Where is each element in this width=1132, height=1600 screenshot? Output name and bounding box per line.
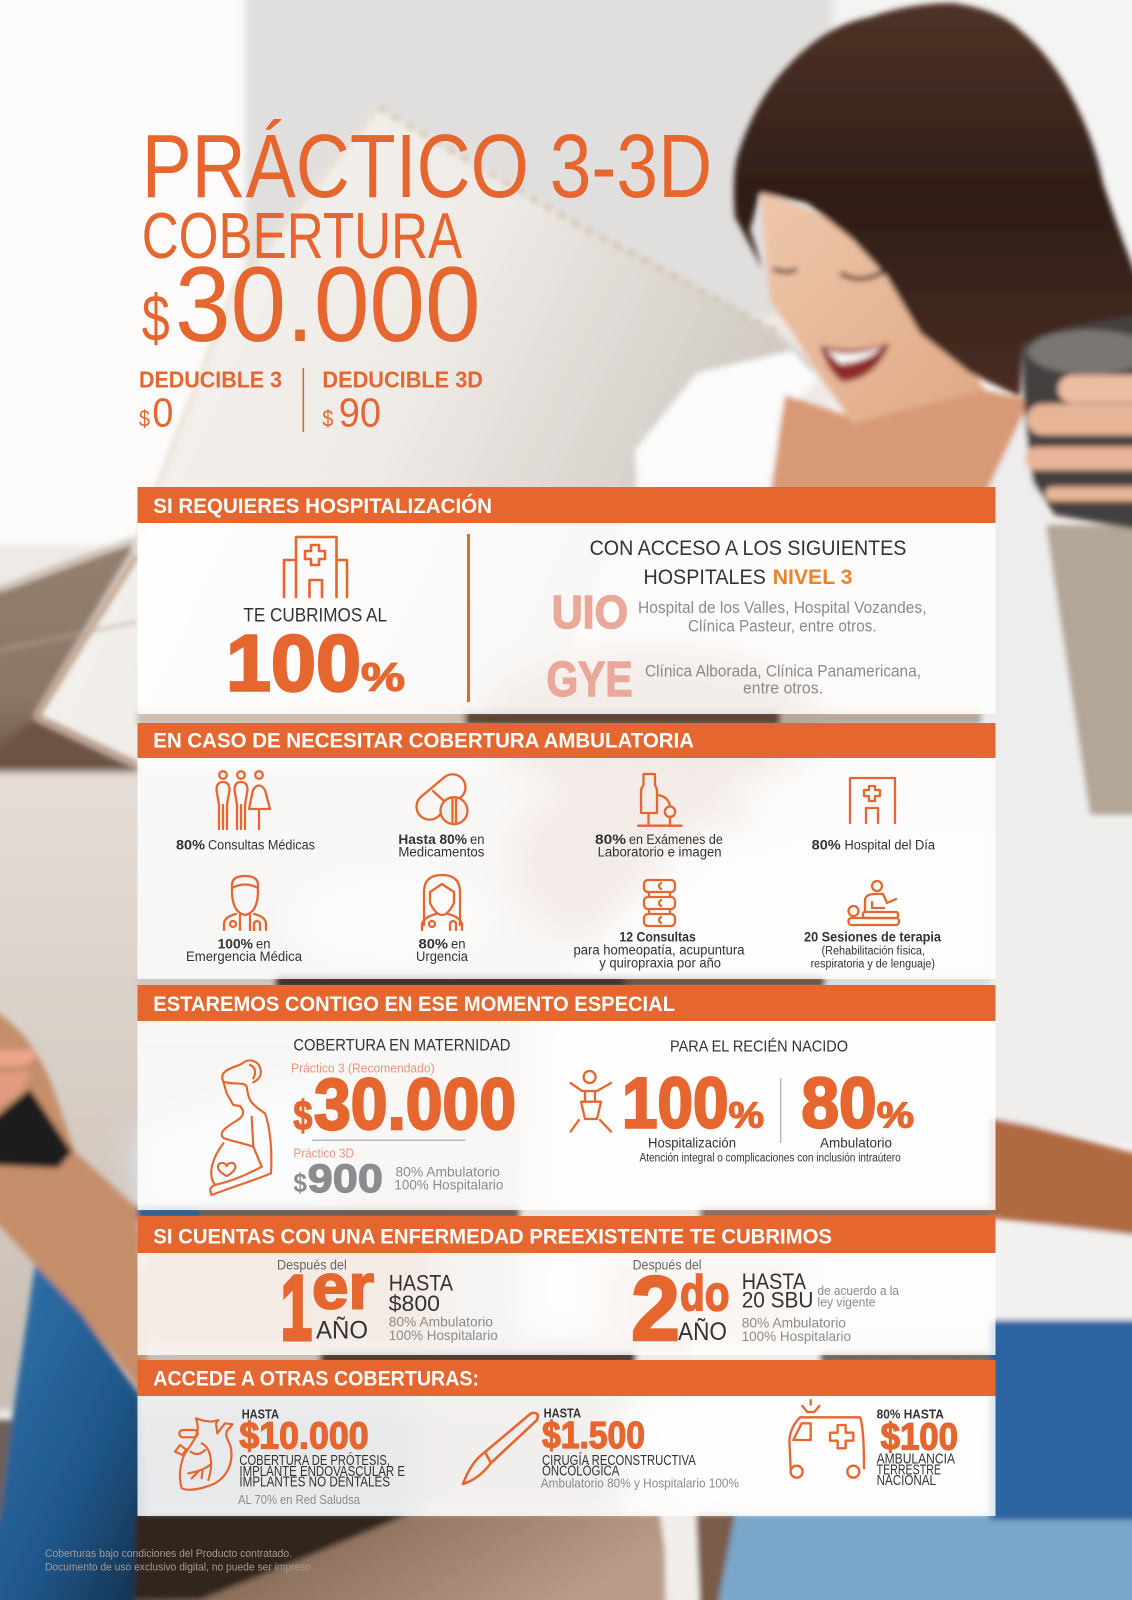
coverage: prosthesis: AL 70% en Red Saludsa: [238, 1492, 361, 1507]
city: GYE: entre otros.: [743, 680, 823, 698]
deductible 3: 0: [152, 390, 173, 436]
heading: maternity coverage: COBERTURA EN MATERNIDAD: [293, 1037, 510, 1055]
amount: $30.000 maternity: $: [293, 1092, 312, 1139]
header bar: SI CUENTAS CON UNA ENFERMEDAD PREEXISTENTE TE CUBRIMOS: [153, 1224, 832, 1248]
header bar: [138, 985, 996, 1021]
text: hospital del dia: Hospital del Día: [844, 837, 935, 852]
text: examenes: 80%: [595, 832, 626, 847]
second year block: do: [680, 1266, 730, 1322]
second year block: Después del: [633, 1256, 702, 1272]
second year block: HASTA: [742, 1269, 806, 1294]
text: $900 split: 100% Hospitalario: [394, 1176, 504, 1192]
icon: scalpel: [463, 1413, 538, 1484]
text: te cubrimos al: TE CUBRIMOS AL: [243, 606, 387, 627]
city: UIO: Clínica Pasteur, entre otros.: [688, 618, 877, 636]
text: consultas medicas: Consultas Médicas: [208, 837, 315, 852]
text: examenes: [595, 832, 723, 860]
panel background: [138, 523, 996, 714]
text: alternative therapies: para homeopatía, acupuntura: [574, 943, 745, 958]
header bar: [138, 1360, 996, 1396]
coverage: prosthesis: COBERTURA DE PRÓTESIS,: [239, 1452, 390, 1469]
deductible 3: $: [139, 406, 150, 432]
text: emergencia medica: [186, 936, 302, 964]
text: consultas medicas: 80%: [176, 837, 205, 852]
stat: 80% outpatient: [801, 1065, 914, 1151]
divider: [780, 1078, 781, 1143]
text: medicamentos: Hasta 80%: [398, 832, 467, 847]
coverage: reconstructive surgery: Ambulatorio 80% y Hospitalario 100%: [541, 1476, 739, 1490]
stat: 100% hospitalization: %: [728, 1095, 764, 1136]
first year block: Después del: [277, 1256, 347, 1272]
vertical divider: [467, 534, 470, 702]
first year block: HASTA: [389, 1271, 453, 1296]
deductible 3D: DEDUCIBLE 3D: [322, 367, 483, 393]
coverage: prosthesis: $10.000: [239, 1415, 369, 1457]
deductible 3D: [322, 367, 483, 436]
amount: $900: $: [293, 1168, 307, 1198]
text: $900 split: [394, 1164, 504, 1192]
deductible divider: [302, 368, 304, 432]
first year block: 1: [281, 1257, 312, 1359]
panel background: [138, 1396, 996, 1516]
first year block: $800: [389, 1291, 440, 1316]
panel background: [138, 1021, 996, 1210]
stat: 100% hospitalization: Hospitalización: [648, 1135, 736, 1151]
coverage: ambulance: AMBULANCIA: [877, 1451, 955, 1467]
coverage: ambulance: NACIONAL: [877, 1473, 936, 1489]
heading: newborn: PARA EL RECIÉN NACIDO: [670, 1037, 848, 1056]
footer note: [45, 1548, 314, 1574]
heading: cobertura: COBERTURA: [142, 199, 463, 272]
coverage: prosthesis: [238, 1406, 405, 1507]
icon: day hospital: [850, 778, 895, 823]
icon: heart: [175, 1418, 233, 1490]
coverage: ambulance: $100: [881, 1416, 958, 1458]
text: urgencia: [416, 936, 468, 964]
footer note: Coberturas bajo condiciones del Producto contratado.: [45, 1548, 292, 1560]
city: UIO: UIO: [552, 586, 628, 638]
second year block: [631, 1256, 900, 1360]
heading: hospital access: NIVEL 3: [773, 565, 853, 589]
deductible 3D: 90: [339, 390, 381, 436]
text: emergencia medica: en: [256, 936, 270, 951]
text: examenes: en Exámenes de: [629, 832, 723, 847]
footer note: Documento de uso exclusivo digital, no puede ser impreso.: [45, 1562, 314, 1574]
text: urgencia: 80%: [418, 936, 448, 951]
text: emergencia medica: 100%: [218, 936, 253, 951]
icon: female doctor: [422, 875, 462, 930]
first year block: 80% Ambulatorio: [389, 1314, 493, 1330]
text: alternative therapies: y quiropraxia por año: [599, 955, 721, 970]
second year block: 20 SBU: [742, 1288, 814, 1313]
panel: pre-existing conditions: [138, 1216, 996, 1360]
icon: spine: [644, 880, 675, 926]
left: hand, arm, phone: [0, 1008, 150, 1400]
text: therapy sessions: (Rehabilitación física,: [822, 946, 925, 958]
icon: baby: [571, 1071, 611, 1132]
stat: 100% hospitalization: 100: [622, 1065, 728, 1144]
city: GYE: GYE: [546, 653, 632, 707]
heading: hospital access: HOSPITALES: [644, 565, 766, 589]
header bar: ACCEDE A OTRAS COBERTURAS:: [153, 1367, 479, 1391]
text: hospital del dia: 80%: [812, 837, 841, 852]
coverage: reconstructive surgery: HASTA: [544, 1406, 582, 1421]
text: medicamentos: en: [470, 832, 484, 847]
deductible 3D: $: [322, 406, 334, 432]
text: alternative therapies: [574, 930, 745, 970]
coverage: prosthesis: HASTA: [242, 1406, 280, 1421]
amount: $30.000 maternity: 30.000: [314, 1065, 516, 1145]
city: UIO: [552, 586, 926, 638]
text: emergencia medica: Emergencia Médica: [186, 949, 302, 964]
header bar: [138, 723, 996, 758]
coverage: ambulance: [877, 1406, 958, 1489]
stat: 80% outpatient: 80: [801, 1065, 877, 1144]
header bar: SI REQUIERES HOSPITALIZACIÓN: [153, 493, 492, 518]
amount: $30.000: $: [142, 281, 170, 355]
icon: ambulance: [789, 1400, 864, 1478]
right side: [990, 1295, 1132, 1520]
first year block: [277, 1250, 498, 1359]
title block: [139, 117, 712, 436]
second year block: de acuerdo a la: [818, 1283, 900, 1298]
header bar: ESTAREMOS CONTIGO EN ESE MOMENTO ESPECIAL: [153, 992, 675, 1016]
first year block: AÑO: [316, 1316, 368, 1345]
city: GYE: Clínica Alborada, Clínica Panamericana,: [645, 663, 921, 681]
title: Práctico 3-3D: PRÁCTICO 3-3D: [142, 117, 712, 217]
header bar: [138, 487, 996, 523]
text: alternative therapies: 12 Consultas: [619, 930, 696, 945]
second year block: 100% Hospitalario: [742, 1328, 851, 1344]
label: practico 3D: Práctico 3D: [293, 1145, 354, 1160]
text: medicamentos: Medicamentos: [398, 845, 485, 860]
panel: maternity: [138, 985, 996, 1210]
icon: male doctor: [224, 876, 266, 930]
panel background: [138, 758, 996, 979]
fingers: [1058, 375, 1132, 403]
coverage: reconstructive surgery: ONCOLÓGICA: [542, 1463, 620, 1480]
bottom floor and leg: [135, 1514, 665, 1600]
stat: 80% outpatient: %: [877, 1095, 914, 1136]
coverage: prosthesis: IMPLANTES NO DENTALES: [239, 1475, 390, 1491]
icon: pills: [411, 769, 471, 825]
strips visible between panels: [137, 711, 467, 725]
heading: hospital access: CON ACCESO A LOS SIGUIENTES: [590, 536, 906, 560]
icon: hospital: [284, 537, 347, 597]
label: practico 3: Práctico 3 (Recomendado): [291, 1061, 435, 1076]
heading: hospital access: [590, 536, 906, 589]
second year block: AÑO: [678, 1317, 727, 1346]
woman's shirt and chest: [635, 350, 817, 490]
coverage: reconstructive surgery: [541, 1406, 739, 1490]
text: urgencia: Urgencia: [416, 949, 468, 964]
text: medicamentos: [398, 832, 485, 860]
coverage: reconstructive surgery: $1.500: [542, 1415, 645, 1457]
coverage: prosthesis: IMPLANTE ENDOVASCULAR E: [239, 1464, 405, 1480]
deductible 3: DEDUCIBLE 3: [139, 367, 282, 393]
second year block: 80% Ambulatorio: [742, 1315, 846, 1331]
coverage: reconstructive surgery: CIRUGÍA RECONSTRUCTIVA: [542, 1452, 696, 1469]
city: GYE: [546, 653, 921, 707]
icon: microscope: [638, 774, 682, 826]
icon: pregnant woman: [210, 1060, 271, 1195]
text: examenes: Laboratorio e imagen: [598, 845, 722, 860]
text: therapy sessions: respiratoria y de lenguaje): [811, 958, 935, 970]
note: integral care: Atención integral o complicaciones con inclusión intraútero: [640, 1153, 901, 1165]
icon: therapy session: [848, 881, 899, 925]
icon: doctors: [216, 771, 270, 829]
second year block: 2: [631, 1258, 680, 1360]
first year block: er: [312, 1250, 374, 1322]
deductible 3: [139, 367, 282, 436]
panel: other coverages: [138, 1360, 996, 1516]
left jeans: [0, 1265, 150, 1600]
mug: [1023, 315, 1132, 530]
rule: [312, 1140, 466, 1141]
first year block: 100% Hospitalario: [389, 1327, 498, 1343]
stat: 80% outpatient: Ambulatorio: [820, 1135, 892, 1151]
pillow edges: [378, 107, 776, 332]
stat: 100%: %: [361, 656, 405, 700]
coverage: ambulance: TERRESTRE: [877, 1462, 941, 1478]
panel: hospitalization: [138, 487, 996, 714]
panel background: [138, 1253, 996, 1355]
text: urgencia: en: [451, 936, 466, 951]
text: therapy sessions: [804, 930, 941, 970]
woman's face: [760, 190, 985, 424]
city: UIO: Hospital de los Valles, Hospital Vozandes,: [638, 599, 926, 617]
text: $900 split: 80% Ambulatorio: [396, 1164, 500, 1180]
coverage: ambulance: 80% HASTA: [877, 1406, 944, 1421]
hair: [734, 3, 1132, 397]
amount: $30.000: 30.000: [175, 244, 480, 364]
second year block: ley vigente: [818, 1295, 876, 1310]
panel: outpatient coverage: [138, 723, 996, 979]
header bar: [138, 1216, 996, 1253]
stat: 100%: 100: [226, 619, 361, 708]
header bar: EN CASO DE NECESITAR COBERTURA AMBULATORIA: [153, 729, 694, 753]
text: therapy sessions: 20 Sesiones de terapia: [804, 930, 941, 945]
amount: $900: 900: [308, 1157, 383, 1201]
